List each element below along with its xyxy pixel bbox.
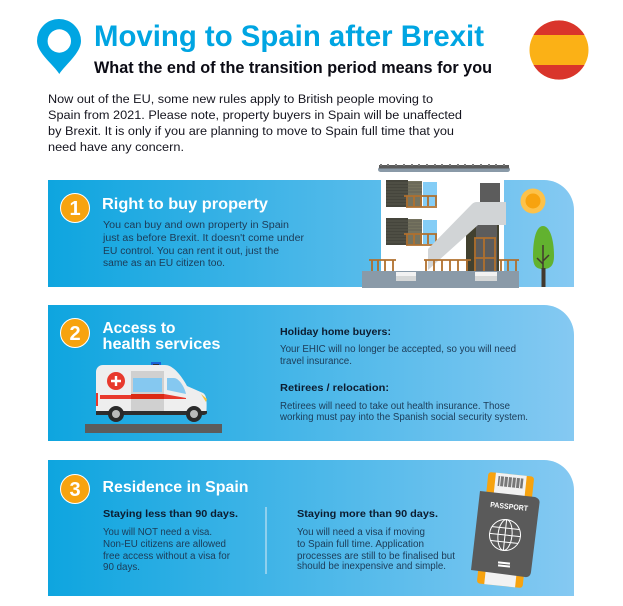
heading 1: Right to buy property bbox=[102, 196, 268, 213]
heading 3: Residence in Spain bbox=[102, 479, 248, 496]
intro text: Spain from 2021. Please note, property buyers in Spain will be unaffected bbox=[48, 108, 462, 122]
icon: Spanish flag circle bbox=[530, 20, 588, 80]
panel 2: access to health services bbox=[48, 305, 574, 441]
intro text: need have any concern. bbox=[48, 140, 184, 154]
text: staying more than 90 days: Staying more than 90 days. bbox=[297, 509, 438, 520]
text: staying more than 90 days bbox=[297, 509, 455, 572]
text: holiday home buyers: travel insurance. bbox=[280, 356, 352, 367]
text: holiday home buyers: Your EHIC will no longer be accepted, so you will need bbox=[280, 344, 516, 355]
number badge 1 bbox=[60, 194, 90, 222]
number badge 3 bbox=[60, 474, 90, 504]
intro text: Now out of the EU, some new rules apply to British people moving to bbox=[48, 92, 433, 106]
intro text bbox=[48, 92, 462, 154]
title: Moving to Spain after Brexit bbox=[94, 20, 484, 53]
text: staying less than 90 days: 90 days. bbox=[103, 562, 140, 573]
illustration: passport and boarding pass: PASSPORT bbox=[490, 500, 529, 513]
text: staying more than 90 days: should be inexpensive and simple. bbox=[297, 561, 446, 572]
body text 1: EU control. You can rent it out, just the bbox=[103, 246, 280, 257]
text: staying less than 90 days: free access without a visa for bbox=[103, 551, 231, 562]
body text 1 bbox=[102, 220, 305, 269]
text: staying less than 90 days: You will NOT need a visa. bbox=[103, 527, 212, 538]
icon: map pin bbox=[37, 19, 81, 74]
illustration: passport and boarding pass bbox=[471, 472, 540, 588]
intro text: by Brexit. It is only if you are planning to move to Spain full time that you bbox=[48, 124, 454, 138]
heading 2: health services bbox=[102, 336, 220, 353]
body text 1: just as before Brexit. It doesn't come under bbox=[102, 233, 305, 244]
panel 3: residence in Spain bbox=[48, 460, 574, 596]
illustration: house bbox=[362, 164, 519, 288]
text: retirees: working must pay into the Spanish social security system. bbox=[279, 412, 528, 423]
number badge 1: 1 bbox=[69, 198, 81, 220]
heading 2: Access to bbox=[102, 320, 176, 337]
text: retirees bbox=[279, 383, 528, 423]
text: retirees: Retirees / relocation: bbox=[280, 383, 389, 394]
text: staying less than 90 days bbox=[103, 509, 238, 573]
number badge 2: 2 bbox=[69, 323, 81, 345]
body text 1: You can buy and own property in Spain bbox=[103, 220, 289, 231]
subtitle: What the end of the transition period means for you bbox=[94, 59, 492, 77]
icon: sun bbox=[520, 188, 546, 214]
text: retirees: Retirees will need to take out health insurance. Those bbox=[280, 401, 511, 412]
text: staying more than 90 days: processes are still to be finalised but bbox=[297, 551, 455, 562]
number badge 2 bbox=[60, 318, 90, 348]
text: staying less than 90 days: Non-EU citizens are allowed bbox=[103, 539, 226, 550]
text: staying less than 90 days: Staying less than 90 days. bbox=[103, 509, 238, 520]
text: staying more than 90 days: to Spain full time. Application bbox=[297, 539, 424, 550]
text: holiday home buyers bbox=[280, 327, 516, 367]
icon: tree bbox=[533, 226, 554, 287]
illustration: ambulance bbox=[85, 362, 222, 433]
number badge 3: 3 bbox=[69, 479, 81, 501]
panel 1: right to buy property bbox=[48, 164, 574, 288]
text: staying more than 90 days: You will need a visa if moving bbox=[297, 527, 425, 538]
text: holiday home buyers: Holiday home buyers: bbox=[280, 327, 391, 338]
body text 1: same as an EU citizen too. bbox=[103, 258, 225, 269]
heading 2 bbox=[102, 320, 220, 353]
